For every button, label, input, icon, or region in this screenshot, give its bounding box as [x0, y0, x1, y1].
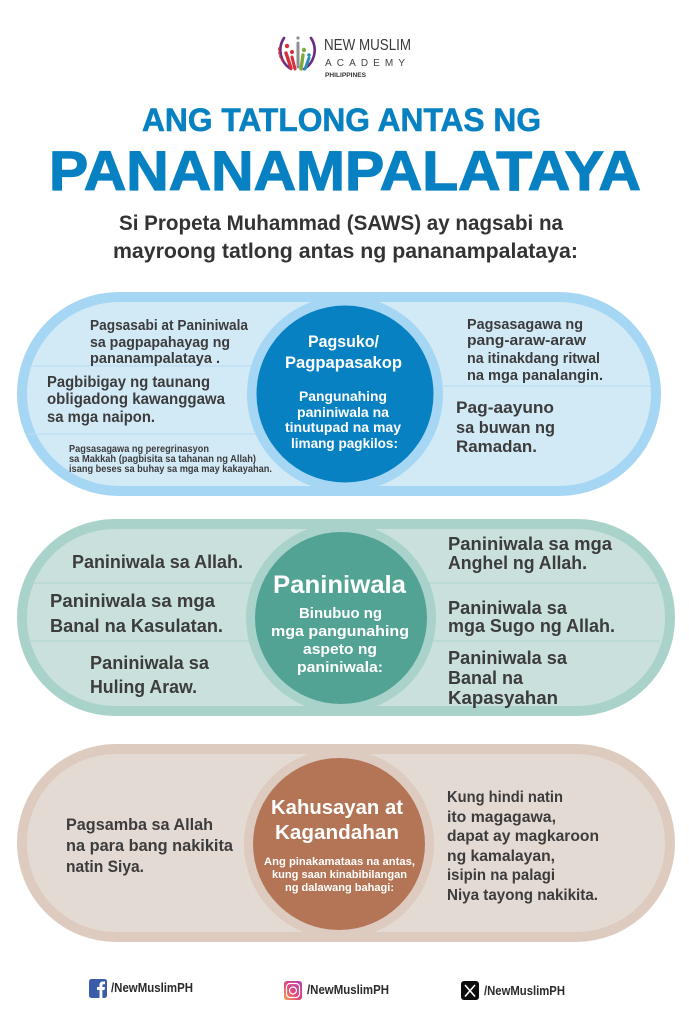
- logo: New Muslim Academy Philippines: PHILIPPINES: [325, 72, 367, 79]
- text: pahayag: pananampalataya .: [90, 351, 220, 367]
- text: kawanggawa: obligadong kawanggawa: [47, 391, 225, 408]
- text: Huling Araw: [90, 653, 210, 697]
- panel: Pagsuko / Pagpapasakop: [22, 296, 656, 492]
- footer: social links: /NewMuslimPH: [484, 983, 565, 998]
- circle: Pagsuko: Pangunahing: [299, 389, 387, 404]
- text: Anghel: [448, 534, 613, 573]
- text: kamalayan: dapat ay magkaroon: [447, 828, 599, 845]
- circle: Kahusayan: Kahusayan at: [271, 797, 403, 819]
- circle: Paniniwala: aspeto ng: [303, 641, 377, 658]
- text: Pagsamba: natin Siya.: [66, 858, 144, 876]
- text: Huling Araw: Huling Araw.: [90, 677, 197, 697]
- circle: Paniniwala: mga pangunahing: [271, 623, 409, 640]
- circle: Paniniwala: Binubuo ng: [299, 605, 382, 622]
- circle: Pagsuko: Pagpapasakop: [285, 353, 402, 372]
- text: Kapasyahan: Banal na: [448, 668, 524, 688]
- text: pag-aayuno: sa buwan ng: [456, 418, 555, 437]
- circle: Kahusayan: kung saan kinabibilangan: [272, 869, 407, 881]
- text: Kapasyahan: [448, 648, 568, 708]
- panel: Kahusayan at Kagandahan: [22, 749, 670, 939]
- text: kamalayan: Kung hindi natin: [447, 789, 563, 806]
- circle: Kahusayan: ng dalawang bahagi:: [285, 882, 394, 894]
- text: Anghel: Paniniwala sa mga: [448, 534, 613, 554]
- text: Allah: Paniniwala sa Allah.: [72, 552, 243, 572]
- text: Sugo: mga Sugo ng Allah.: [448, 616, 615, 636]
- circle: Pagsuko: [247, 296, 443, 492]
- text: pahayag: Pagsasabi at Paniniwala: [90, 318, 249, 334]
- icon: Facebook: [89, 979, 107, 998]
- text: peregrinasyon: [69, 444, 272, 475]
- logo: New Muslim Academy Philippines: NEW MUSLIM: [324, 37, 411, 54]
- text: kamalayan: Niya tayong nakikita.: [447, 887, 598, 904]
- text: Pagsamba: [66, 816, 234, 876]
- text: panalangin: Pagsasagawa ng: [467, 317, 583, 333]
- text: pag-aayuno: [456, 398, 555, 456]
- text: Pagsamba: na para bang nakikita: [66, 837, 234, 855]
- text: pahayag: sa pagpapahayag ng: [90, 335, 230, 351]
- circle: Paniniwala: [246, 523, 436, 713]
- intro text: mayroong tatlong antas ng pananampalataya:: [113, 240, 578, 263]
- circle: Kahusayan: Ang pinakamataas na antas,: [264, 856, 415, 868]
- title: PANANAMPALATAYA: [49, 139, 641, 202]
- footer: social links: /NewMuslimPH: [111, 980, 193, 995]
- text: peregrinasyon: Pagsasagawa ng peregrinasyon: [69, 444, 209, 455]
- text: kamalayan: [447, 789, 599, 904]
- text: Kapasyahan: Kapasyahan: [448, 688, 558, 708]
- logo: New Muslim Academy Philippines: ACADEMY: [325, 58, 405, 69]
- intro text: [113, 212, 578, 263]
- panel: Paniniwala: [22, 523, 670, 713]
- circle: Pagsuko: paniniwala na: [297, 405, 390, 420]
- circle: Paniniwala: paniniwala:: [297, 659, 383, 676]
- text: kawanggawa: sa mga naipon.: [47, 409, 155, 426]
- text: Sugo: [448, 598, 615, 636]
- text: Kasulatan: Banal na Kasulatan.: [50, 616, 223, 636]
- text: peregrinasyon: isang beses sa buhay sa mga may kakayahan.: [69, 464, 272, 475]
- circle: Kahusayan: Kagandahan: [275, 822, 399, 844]
- text: peregrinasyon: sa Makkah (pagbisita sa tahanan ng Allah): [69, 454, 256, 465]
- text: Kapasyahan: Paniniwala sa: [448, 648, 568, 668]
- text: panalangin: [467, 317, 603, 384]
- title: [49, 102, 641, 202]
- icon: Instagram: [284, 981, 302, 1000]
- text: Pagsamba: Pagsamba sa Allah: [66, 816, 213, 834]
- text: kamalayan: ito magagawa,: [447, 809, 556, 826]
- text: kawanggawa: Pagbibigay ng taunang: [47, 374, 210, 391]
- text: Kasulatan: [50, 591, 223, 636]
- circle: Pagsuko: tinutupad na may: [285, 420, 402, 435]
- text: panalangin: na mga panalangin.: [467, 368, 603, 384]
- intro text: Si Propeta Muhammad (SAWS) ay nagsabi na: [119, 212, 563, 235]
- circle: Pagsuko: Pagsuko/: [308, 332, 379, 351]
- text: panalangin: na itinakdang ritwal: [467, 351, 600, 367]
- logo: New Muslim Academy Philippines: [279, 36, 411, 79]
- circle: Kahusayan: [244, 749, 434, 939]
- text: panalangin: pang-araw-araw: [467, 333, 587, 349]
- circle: Paniniwala: Paniniwala: [273, 571, 407, 599]
- icon: logo globe with figures: [279, 36, 315, 69]
- text: Anghel: Anghel ng Allah.: [448, 553, 587, 573]
- text: Huling Araw: Paniniwala sa: [90, 653, 210, 673]
- text: kamalayan: isipin na palagi: [447, 867, 555, 884]
- icon: X: [461, 981, 479, 1000]
- text: Kasulatan: Paniniwala sa mga: [50, 591, 216, 611]
- text: pag-aayuno: Pag-aayuno: [456, 398, 554, 417]
- text: Sugo: Paniniwala sa: [448, 598, 568, 618]
- text: pag-aayuno: Ramadan.: [456, 437, 537, 456]
- circle: Pagsuko: limang pagkilos:: [291, 436, 398, 451]
- text: kawanggawa: [47, 374, 225, 426]
- text: pahayag: [90, 318, 249, 367]
- text: kamalayan: ng kamalayan,: [447, 848, 555, 865]
- footer: social links: /NewMuslimPH: [307, 982, 389, 997]
- footer: social links: [89, 979, 565, 1000]
- title: ANG TATLONG ANTAS NG: [142, 102, 541, 138]
